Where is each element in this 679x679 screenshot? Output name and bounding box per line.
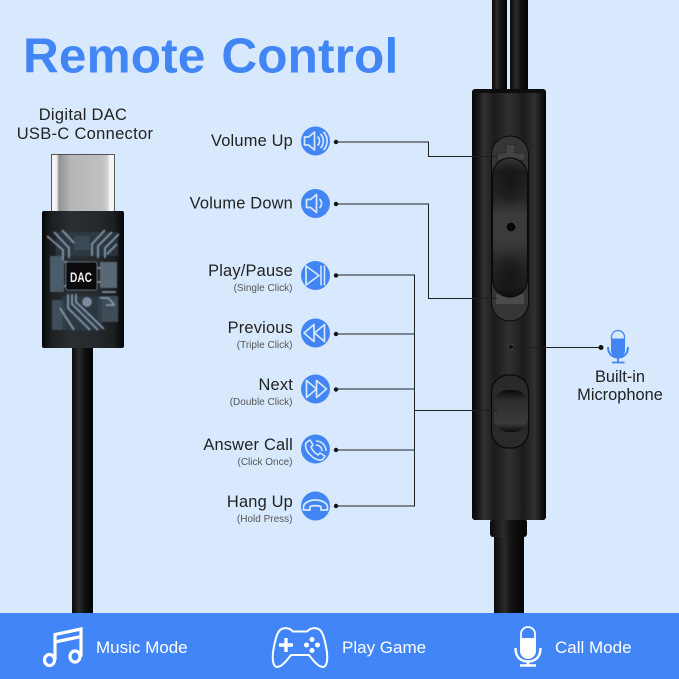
label: answer call: Answer Call bbox=[203, 436, 293, 454]
leader lines bbox=[336, 142, 601, 506]
multi-function button bbox=[492, 375, 528, 448]
label: previous bbox=[228, 319, 293, 351]
music mode label: Music Mode bbox=[96, 638, 188, 657]
label: play pause: (Single Click) bbox=[234, 283, 292, 294]
icon: next bbox=[301, 374, 330, 404]
icon: hang up bbox=[301, 492, 330, 520]
label: next: (Double Click) bbox=[230, 397, 292, 408]
label: play pause: Play/Pause bbox=[208, 262, 293, 280]
bottom cable bbox=[490, 519, 527, 613]
control icons bbox=[301, 126, 330, 520]
play game label: Play Game bbox=[342, 638, 426, 657]
USB-C connector bbox=[42, 154, 124, 613]
cable: connector bbox=[72, 346, 93, 613]
label: hang up: (Hold Press) bbox=[237, 514, 292, 525]
centre hole bbox=[506, 222, 516, 232]
icon: call microphone bbox=[516, 627, 540, 666]
label: hang up bbox=[227, 493, 293, 525]
inline control remote bbox=[472, 0, 546, 613]
icon: music note bbox=[44, 629, 81, 666]
metal plug bbox=[52, 154, 114, 212]
leader dots bbox=[334, 140, 604, 508]
icon: play pause bbox=[301, 261, 330, 290]
microphone label bbox=[577, 368, 663, 404]
icon: volume up bbox=[301, 126, 330, 156]
connector label bbox=[17, 106, 153, 143]
bottom bar bbox=[0, 613, 679, 679]
label: volume up: Volume Up bbox=[211, 132, 293, 150]
volume rocker housing bbox=[492, 136, 528, 321]
label: previous: (Triple Click) bbox=[237, 340, 292, 351]
DAC chip: DAC bbox=[70, 269, 92, 285]
connector label: Digital DAC bbox=[39, 106, 127, 124]
circuit pattern bbox=[47, 230, 119, 330]
minus mark bbox=[496, 294, 524, 304]
microphone callout bbox=[577, 331, 663, 404]
label: next bbox=[230, 376, 293, 408]
call mode label: Call Mode bbox=[555, 638, 632, 657]
icon: volume down bbox=[301, 189, 330, 218]
icon: answer call bbox=[301, 434, 330, 464]
rocker button bbox=[492, 158, 528, 297]
DAC chip bbox=[66, 262, 97, 290]
icon: microphone bbox=[608, 331, 628, 362]
plus mark bbox=[497, 144, 525, 160]
label: answer call: (Click Once) bbox=[237, 457, 292, 468]
label: previous: Previous bbox=[228, 319, 293, 337]
top cables bbox=[492, 0, 528, 92]
title: Remote Control bbox=[23, 28, 398, 84]
microphone hole bbox=[508, 344, 514, 350]
connector label: USB-C Connector bbox=[17, 125, 153, 143]
label: volume down: Volume Down bbox=[190, 194, 293, 212]
label: next: Next bbox=[258, 376, 293, 394]
connector body bbox=[42, 211, 124, 348]
label: answer call bbox=[203, 436, 293, 468]
control labels bbox=[190, 132, 293, 525]
microphone label: Microphone bbox=[577, 386, 663, 404]
remote body bbox=[472, 89, 546, 520]
icon: game controller bbox=[273, 628, 327, 667]
icon: previous bbox=[301, 318, 330, 348]
microphone label: Built-in bbox=[595, 368, 645, 386]
label: play pause bbox=[208, 262, 293, 294]
label: hang up: Hang Up bbox=[227, 493, 293, 511]
